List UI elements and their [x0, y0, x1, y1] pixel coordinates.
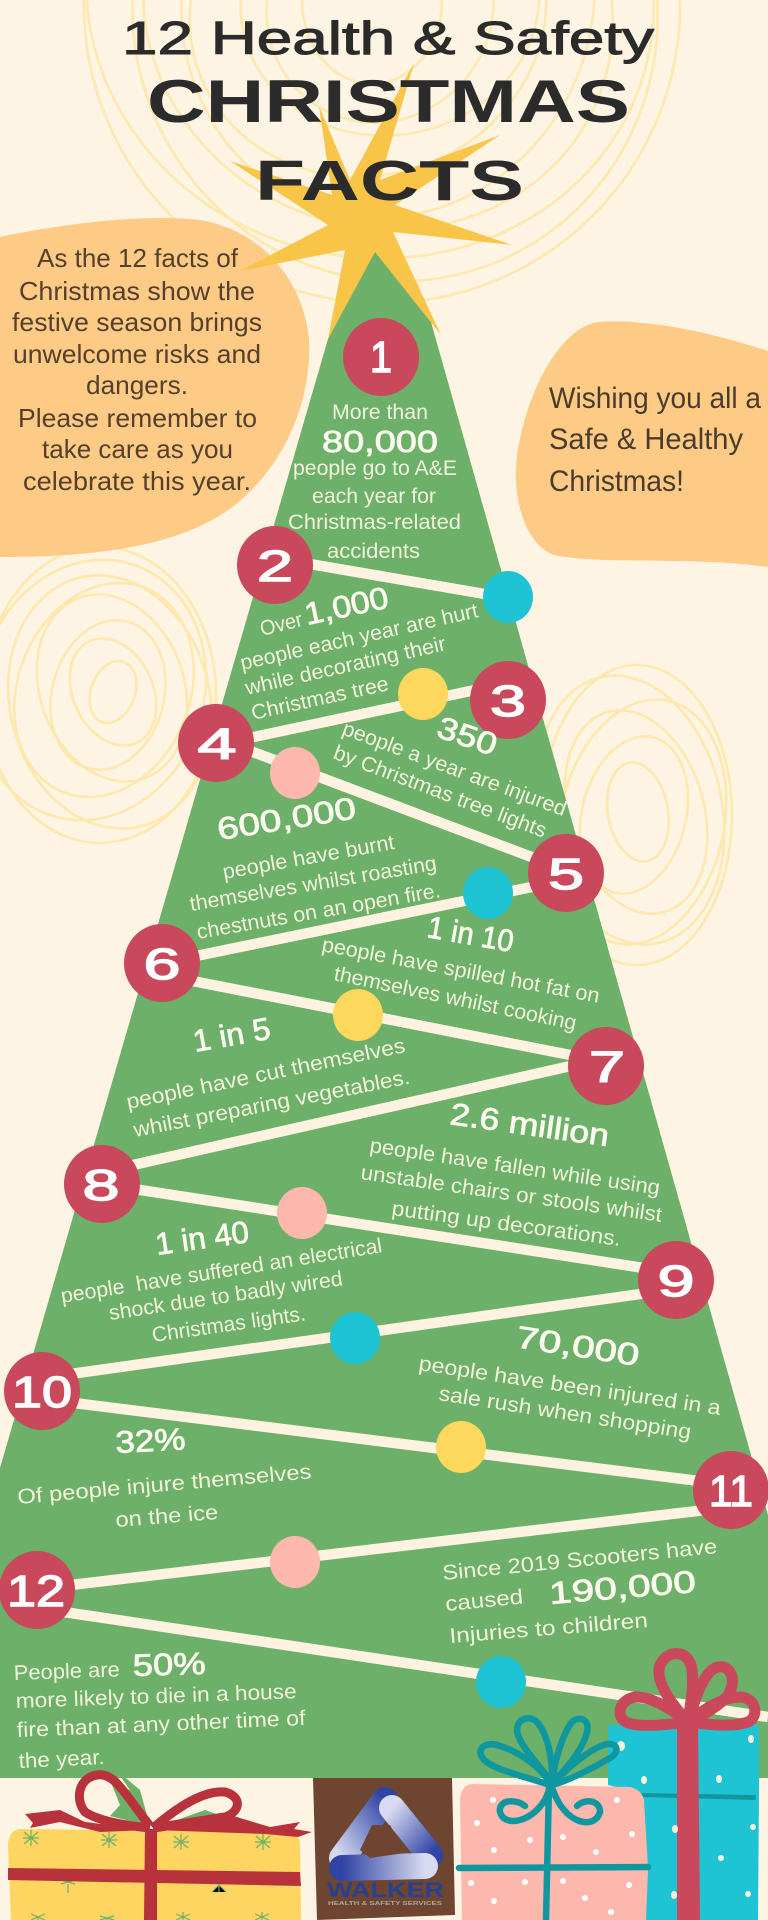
pink box dots [468, 1797, 635, 1915]
number badges: 11 [709, 1467, 753, 1516]
yellow box bow [79, 1775, 237, 1828]
logo mark: three linked arms [342, 1800, 430, 1868]
fact 11 text: Since 2019 Scooters have [441, 1535, 718, 1585]
fact 7 text: people have fallen while using [368, 1134, 661, 1200]
fact 2 text: Over [258, 608, 305, 641]
fact 9 text: sale rush when shopping [437, 1382, 693, 1444]
fact 11 text: caused [444, 1585, 524, 1616]
number badges: 2 [257, 542, 293, 591]
greeting text: Safe & Healthy [549, 423, 743, 456]
number badges: 5 [548, 850, 584, 899]
title [122, 12, 654, 213]
gift: pink box [459, 1718, 648, 1920]
panel: right greeting blob [516, 321, 768, 567]
fact 7 text: putting up decorations. [390, 1197, 622, 1251]
fact 6 text: whilst preparing vegetables. [131, 1066, 412, 1142]
fact 8 text: 1 in 40 [153, 1214, 251, 1262]
greeting text: Christmas! [549, 465, 684, 498]
fact 2 text [238, 580, 480, 725]
icon: star tree topper [230, 63, 512, 339]
fact 5 text: themselves whilst cooking [332, 962, 579, 1035]
intro text: dangers. [86, 370, 188, 400]
fact 1 text: Christmas-related [288, 511, 461, 534]
fact 12 text: fire than at any other time of [16, 1707, 306, 1742]
fact 10 text: Of people injure themselves [16, 1460, 312, 1509]
fact 1 text: More than [332, 401, 428, 424]
fact 8 text: Christmas lights. [150, 1302, 307, 1347]
fact 4 text: 600,000 [215, 790, 358, 847]
number badges: 12 [7, 1567, 65, 1616]
gift: teal box [608, 1654, 759, 1920]
fact 2 text: 1,000 [301, 580, 392, 632]
intro text: Please remember to [18, 403, 257, 433]
fact 2 text: people each year are hurt [238, 599, 480, 675]
fact 5 text: people have spilled hot fat on [320, 933, 601, 1008]
number badges: 1 [370, 333, 392, 382]
title: 12 Health & Safety [122, 12, 654, 64]
fact 12 text: the year. [18, 1746, 105, 1773]
fact 8 text: shock due to badly wired [107, 1267, 344, 1325]
number badges: 6 [144, 940, 180, 989]
gift: yellow box [8, 1770, 312, 1920]
greeting text [549, 382, 761, 498]
fact 1 text: accidents [327, 540, 420, 563]
logo wordmark: WALKER [327, 1879, 444, 1902]
intro text: As the 12 facts of [37, 243, 239, 273]
fact 10 text: 32% [115, 1421, 186, 1460]
teal box dots [617, 1735, 756, 1899]
fact 1 text [288, 401, 461, 563]
fact 3 text: 350 [433, 710, 502, 762]
number badges [0, 318, 768, 1629]
fact 1 text: people go to A&E [293, 457, 457, 480]
fact 9 text: people have been injured in a [417, 1352, 723, 1420]
number badges: 10 [12, 1368, 72, 1417]
intro text: Christmas show the [19, 276, 255, 306]
fact 6 text [124, 1011, 412, 1142]
fact 12 text: 50% [132, 1646, 206, 1683]
fact 9 text: 70,000 [514, 1319, 642, 1373]
intro text [12, 243, 262, 496]
title: FACTS [255, 149, 524, 213]
number badges: 3 [490, 677, 526, 726]
intro text: festive season brings [12, 307, 262, 337]
fact 5 text [320, 909, 601, 1035]
fact 5 text: 1 in 10 [425, 909, 517, 959]
fact 3 text: people a year are injured [339, 717, 570, 821]
pink box ribbon and bow [459, 1718, 648, 1920]
fact 4 text: people have burnt [221, 831, 396, 884]
fact 4 text: themselves whilst roasting [188, 852, 438, 916]
fact 12 text [13, 1646, 306, 1773]
number badges: 4 [198, 720, 236, 769]
fact 7 text: 2.6 million [448, 1096, 611, 1153]
fact 1 text: each year for [312, 485, 436, 508]
fact 3 text: by Christmas tree lights [330, 741, 550, 843]
title: CHRISTMAS [147, 68, 630, 135]
fact 10 text [16, 1421, 312, 1532]
yellow box stars [23, 1830, 271, 1920]
garland lines [37, 558, 768, 1717]
fact 4 text [188, 790, 442, 944]
christmas tree [0, 245, 768, 1778]
fact 1 text: 80,000 [322, 424, 438, 459]
fact 7 text [359, 1096, 664, 1251]
fact 8 text: people have suffered an electrical [59, 1234, 384, 1308]
fact 7 text: unstable chairs or stools whilst [359, 1161, 664, 1227]
number badges: 9 [658, 1257, 694, 1306]
panel: left intro blob [0, 218, 309, 557]
fact 6 text: 1 in 5 [190, 1011, 273, 1059]
fact 2 text: Christmas tree [249, 672, 391, 725]
number badges: 8 [82, 1161, 120, 1210]
fact 10 text: on the ice [115, 1501, 219, 1532]
logo: Walker Health & Safety Services [313, 1778, 455, 1920]
decorative baubles [270, 571, 533, 1708]
intro text: unwelcome risks and [13, 339, 261, 369]
teal box bow [620, 1654, 755, 1725]
fact 4 text: chestnuts on an open fire. [195, 879, 442, 944]
logo wordmark: HEALTH & SAFETY SERVICES [328, 1901, 442, 1907]
fact 11 text [441, 1535, 718, 1648]
fact 12 text: People are [13, 1658, 120, 1685]
fact 6 text: people have cut themselves [124, 1034, 407, 1114]
fact 9 text [417, 1319, 723, 1444]
number badges: 7 [589, 1043, 625, 1092]
fact 2 text: while decorating their [242, 632, 448, 700]
intro text: celebrate this year. [23, 466, 251, 496]
fact 8 text [59, 1214, 384, 1347]
fact 11 text: 190,000 [548, 1564, 697, 1611]
fact 12 text: more likely to die in a house [15, 1680, 297, 1713]
fact 11 text: Injuries to children [449, 1609, 649, 1648]
logo wordmark [327, 1879, 444, 1907]
intro text: take care as you [42, 434, 233, 464]
